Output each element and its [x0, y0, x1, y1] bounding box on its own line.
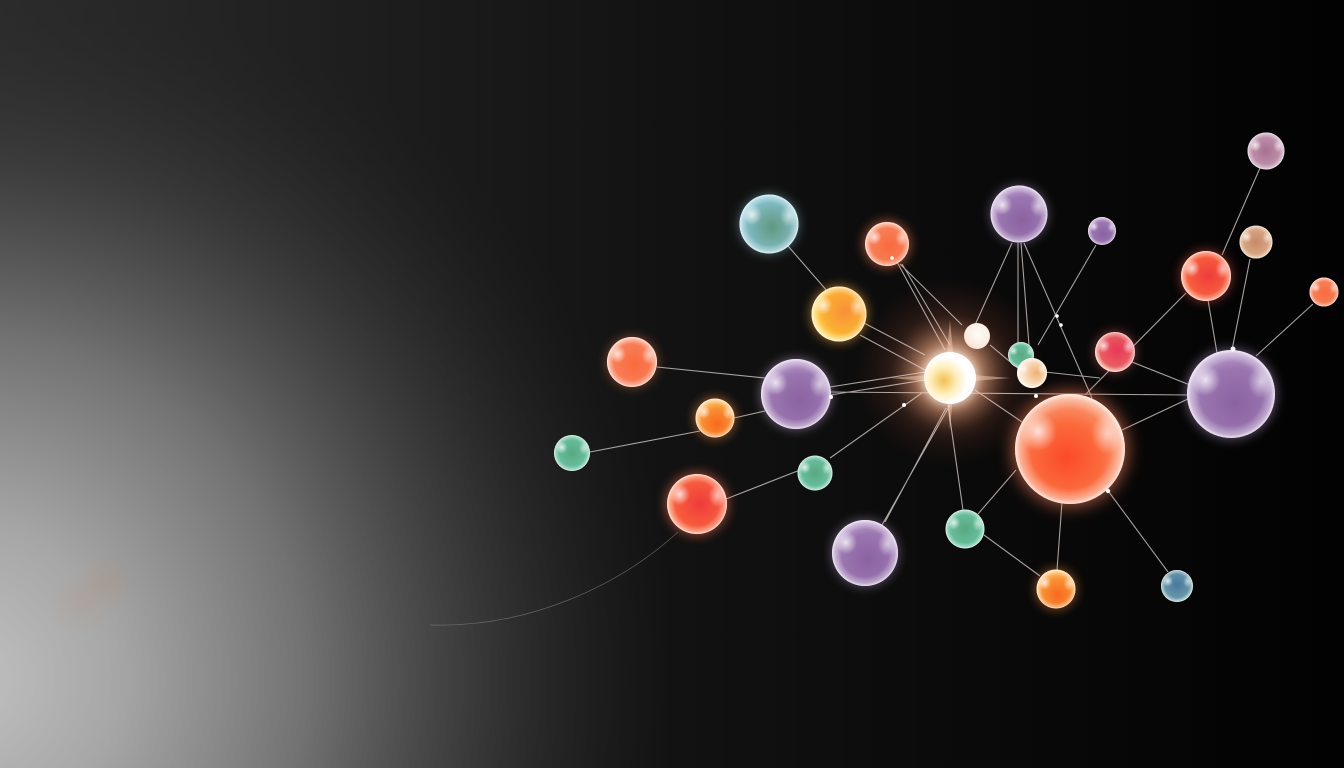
sphere: large purple right: [1185, 348, 1277, 440]
spheres: [554, 132, 1338, 610]
sphere: steel blue: [1161, 570, 1193, 602]
sphere: purple centre-left: [760, 358, 832, 430]
central burst: [855, 277, 1045, 467]
sphere: white: [964, 323, 990, 349]
connecting lines: [590, 168, 1313, 576]
sphere: tangerine bottom: [1035, 568, 1077, 610]
sphere: green lower: [798, 456, 832, 490]
sphere: large red-orange: [1012, 391, 1128, 507]
sphere: purple bottom: [831, 519, 899, 587]
sphere: red right: [1180, 250, 1232, 302]
sphere: red-orange lower left: [665, 472, 729, 536]
sphere: green left: [554, 435, 590, 471]
sphere: orange left: [606, 336, 658, 388]
sphere: green centre: [1008, 342, 1034, 368]
sphere: tangerine small: [694, 397, 736, 439]
sphere: orange far right: [1310, 278, 1338, 306]
sphere: cream centre: [1017, 358, 1047, 388]
sphere: teal top: [739, 194, 799, 254]
sparkle points: [829, 256, 1236, 493]
sphere: peach: [1240, 226, 1272, 258]
sphere: orange top: [863, 220, 911, 268]
faint curved trail: [430, 532, 678, 625]
sphere: amber: [810, 285, 868, 343]
sphere: glowing core: [916, 344, 984, 412]
sphere: mauve top right: [1248, 132, 1284, 170]
sphere: purple top: [990, 185, 1048, 243]
sphere: green bottom: [946, 510, 984, 548]
sphere: pink-red: [1094, 331, 1136, 373]
sphere: small purple: [1088, 217, 1116, 245]
